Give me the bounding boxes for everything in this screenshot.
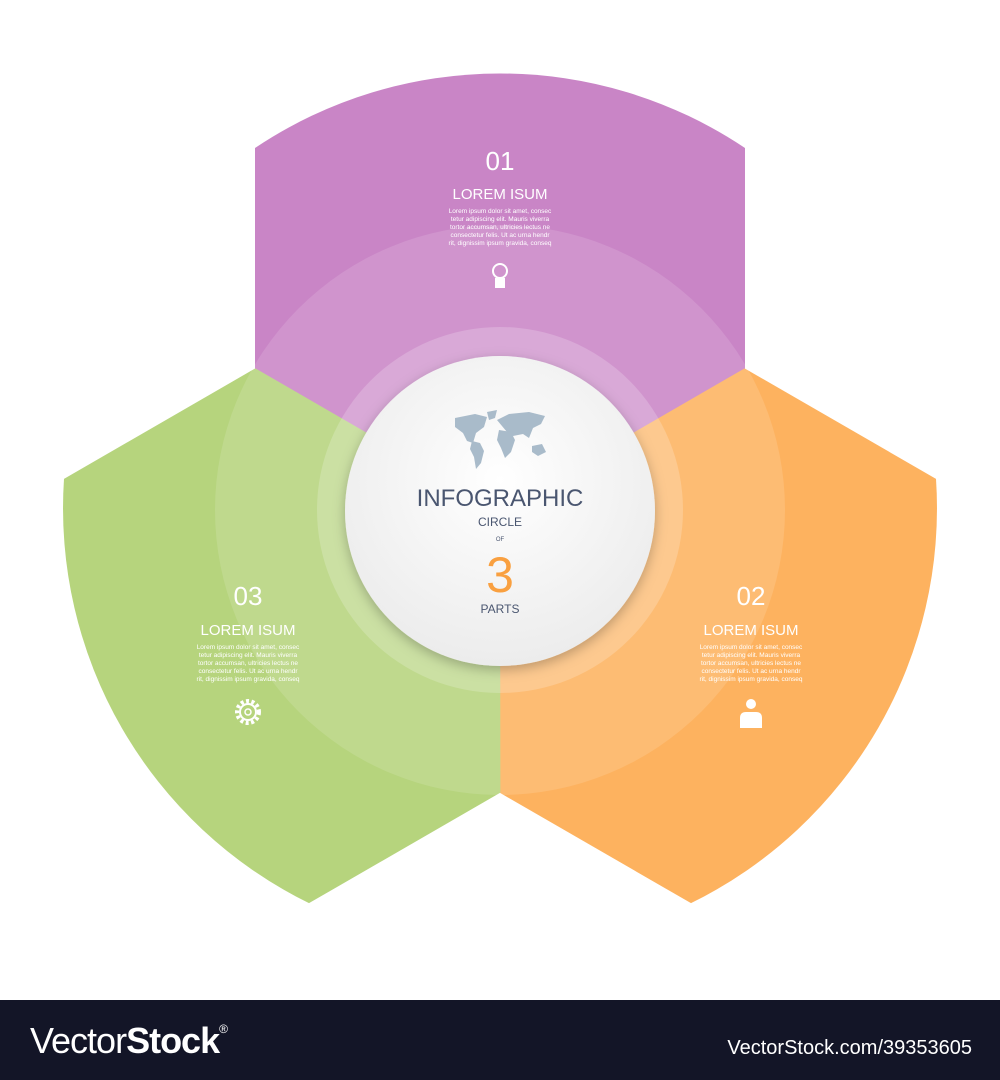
- footer: VectorStock: [30, 1020, 219, 1061]
- text block: 03: rit, dignissim ipsum gravida, conseq: [197, 676, 300, 683]
- text block: 02: LOREM ISUM: [703, 622, 799, 639]
- text block: 01: [449, 146, 552, 247]
- text block: 02: 02: [737, 581, 765, 611]
- panel: 01 purple segment: [255, 73, 745, 510]
- text block: 02: rit, dignissim ipsum gravida, conseq: [700, 676, 803, 683]
- panel: 03 green segment: [0, 298, 622, 940]
- text block: 03: Lorem ipsum dolor sit amet, consec: [197, 644, 300, 651]
- center circle: [345, 356, 655, 666]
- footer: [0, 1000, 1000, 1080]
- text block: 02: Lorem ipsum dolor sit amet, consec: [700, 644, 803, 651]
- center circle: PARTS: [481, 602, 519, 616]
- text block: 03: [197, 581, 300, 683]
- text block: 01: tortor accumsan, ultricies lectus ne: [450, 224, 550, 231]
- footer: ®: [219, 1022, 228, 1036]
- text block: 01: 01: [486, 146, 514, 176]
- icon: bulb: [493, 264, 507, 287]
- center circle: OF: [496, 537, 504, 543]
- icon: world map: [455, 410, 546, 469]
- text block: 03: tortor accumsan, ultricies lectus ne: [198, 660, 298, 667]
- outer ring: [215, 225, 785, 795]
- text block: 02: [700, 581, 803, 683]
- footer: VectorStock.com/39353605: [727, 1037, 972, 1059]
- text block: 03: consectetur felis. Ut ac urna hendr: [198, 668, 298, 675]
- text block: 02: tetur adipiscing elit. Mauris viverra: [702, 652, 801, 659]
- text block: 03: tetur adipiscing elit. Mauris viverra: [199, 652, 298, 659]
- text block: 01: consectetur felis. Ut ac urna hendr: [450, 232, 550, 239]
- number 3: 3: [486, 547, 514, 603]
- inner ring: [317, 327, 683, 693]
- panel: 02 orange segment: [378, 298, 1000, 940]
- text block: 01: Lorem ipsum dolor sit amet, consec: [449, 208, 552, 215]
- title text: INFOGRAPHIC: [417, 485, 583, 512]
- text block: 03: 03: [234, 581, 262, 611]
- text block: 01: rit, dignissim ipsum gravida, conseq: [449, 240, 552, 247]
- text block: 02: consectetur felis. Ut ac urna hendr: [702, 668, 801, 675]
- text block: 01: tetur adipiscing elit. Mauris viverra: [451, 216, 550, 223]
- icon: gear: [237, 701, 259, 723]
- icon: person: [740, 699, 762, 728]
- text block: 01: LOREM ISUM: [452, 186, 548, 203]
- text block: 03: LOREM ISUM: [200, 622, 296, 639]
- center circle: CIRCLE: [478, 515, 522, 529]
- text block: 02: tortor accumsan, ultricies lectus ne: [701, 660, 801, 667]
